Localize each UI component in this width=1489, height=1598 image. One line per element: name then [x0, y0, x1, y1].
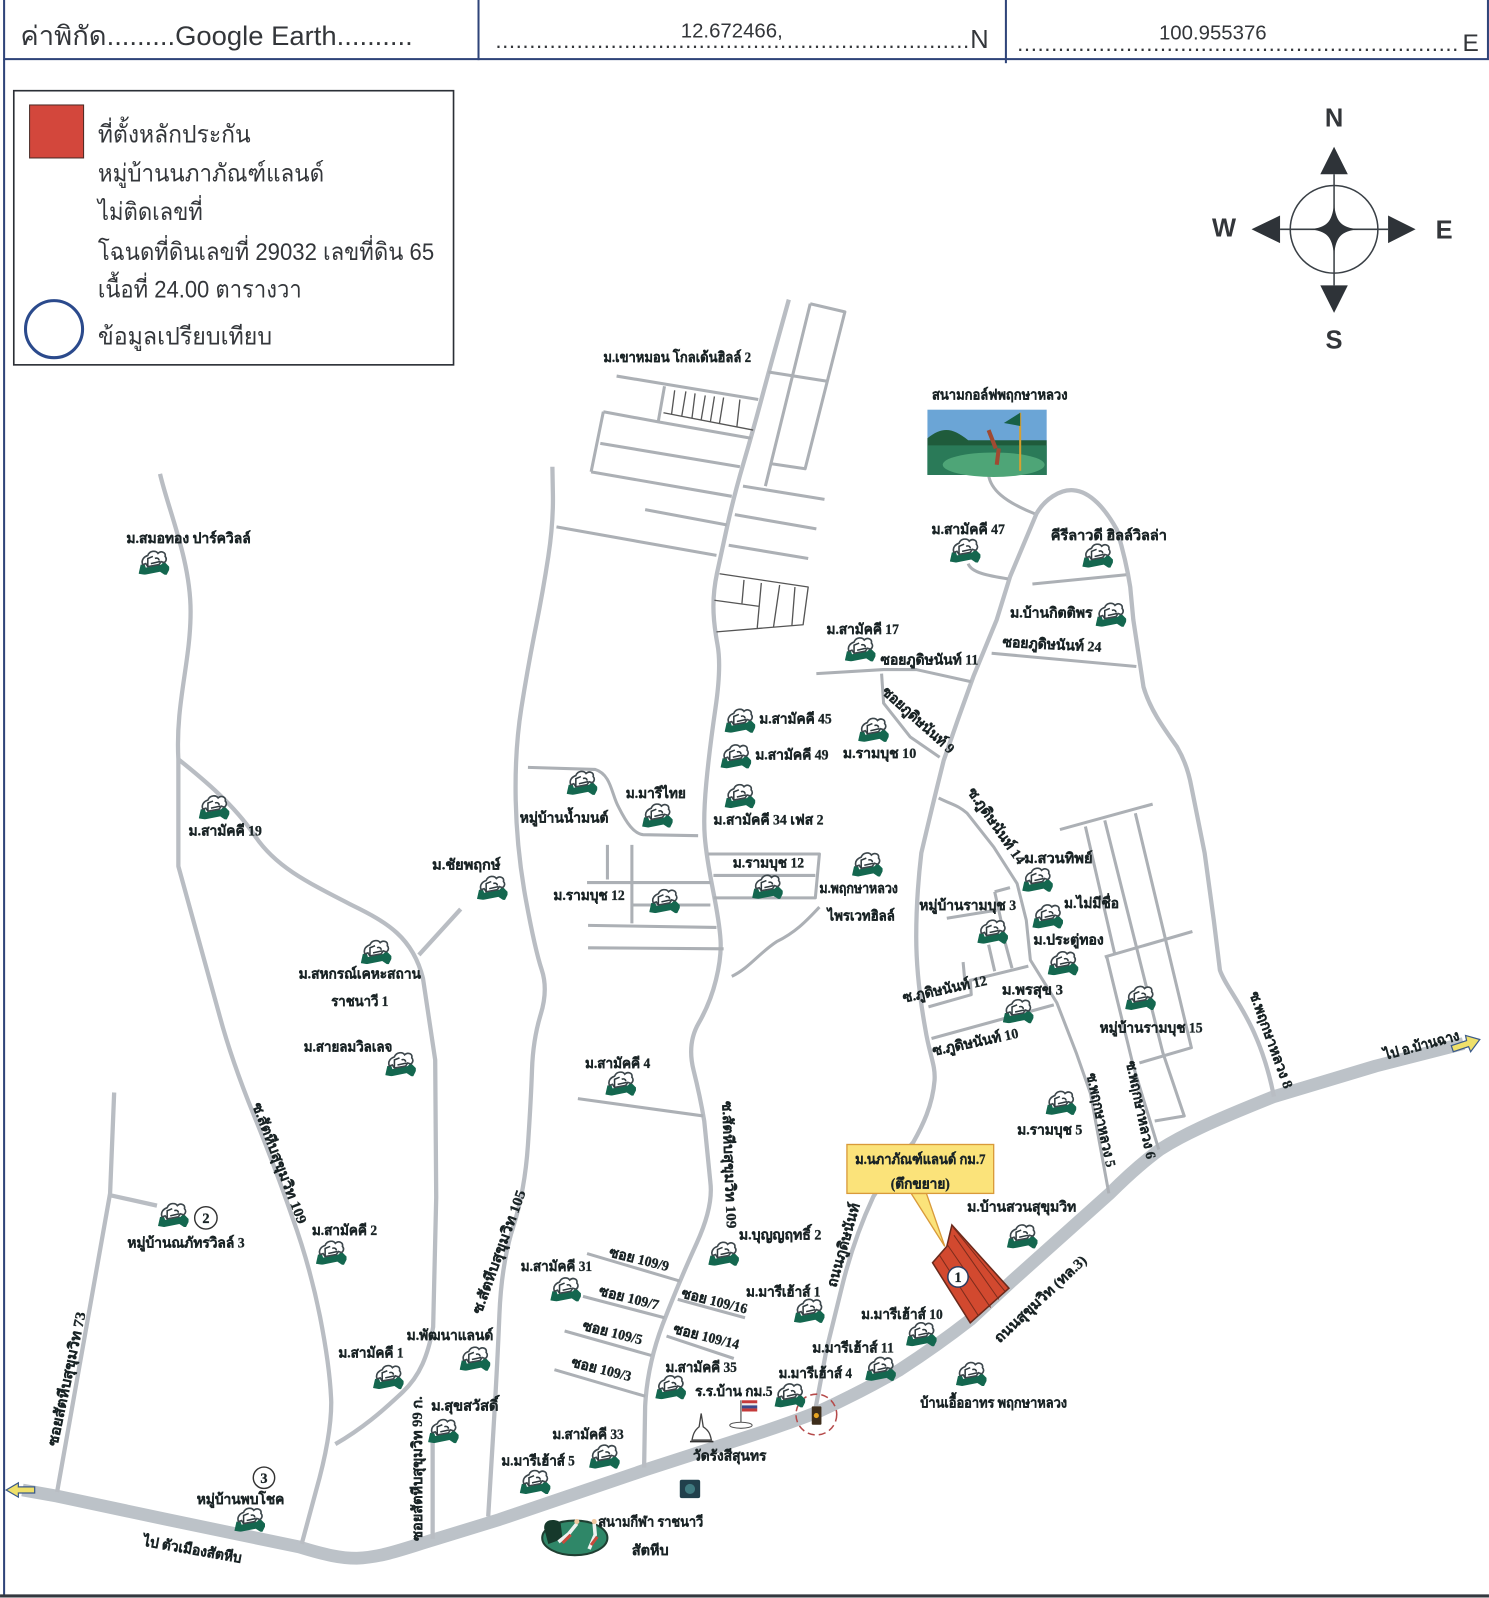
road label: Soi 24: ซอยภูดิษนันท์ 24	[1002, 634, 1102, 656]
village: Samakkhi 47: ม.สามัคคี 47	[932, 522, 1005, 538]
village: Samakkhi 2: ม.สามัคคี 2	[312, 1223, 377, 1239]
legend text: comparable data: ข้อมูลเปรียบเทียบ	[98, 323, 272, 351]
village 2: Naphat Ville 3: 2	[202, 1211, 209, 1227]
legend text: subject plot: ไม่ติดเลขที่	[96, 195, 203, 226]
village: Rambuch 3	[919, 897, 1016, 945]
village: Samakkhi 31: ม.สามัคคี 31	[521, 1259, 592, 1275]
village: Marine Thai: ม.มารีไทย	[626, 784, 686, 802]
soi Phuditsanan 14	[939, 798, 1109, 1193]
village: Marine House 4	[775, 1365, 852, 1408]
latitude value: 12.672466,	[681, 21, 783, 43]
village: Samo Thong	[126, 530, 251, 576]
legend text: subject plot: ที่ตั้งหลักประกัน	[98, 117, 251, 149]
sois 12 and 10	[928, 888, 1054, 1038]
callout: (ตึกขยาย)	[891, 1175, 950, 1192]
sois 109 side streets	[554, 1254, 745, 1396]
latitude value: ......................................................................	[495, 28, 969, 53]
stadium icon	[542, 1519, 607, 1555]
village: Rambuch 15	[1100, 986, 1203, 1036]
village: Chaiyaphruek	[432, 856, 509, 901]
village: Rambuch 5: ม.รามบุช 5	[1017, 1122, 1082, 1138]
village: Samo Thong: ม.สมอทอง ปาร์ควิลล์	[126, 530, 251, 547]
road label: Soi 109/16: ซอย 109/16	[680, 1286, 749, 1318]
village: Rambuch 15: หมู่บ้านรามบุช 15	[1100, 1019, 1203, 1036]
legend text: subject plot: เนื้อที่ 24.00 ตารางวา	[98, 272, 302, 304]
legend text: subject plot	[96, 117, 434, 304]
road label: Sattahip 109 centre: ซ.สัตหีบสุขุมวิท 109	[718, 1101, 740, 1229]
village: Sai Lom: ม.สายลมวิลเลจ	[304, 1039, 392, 1056]
village: Samakkhi 1	[338, 1345, 405, 1390]
callout: ม.นภาภัณฑ์แลนด์ กม.7	[855, 1151, 986, 1168]
village 3: Phop Chok: หมู่บ้านพบโชค	[197, 1490, 284, 1508]
golf picture	[927, 410, 1047, 477]
village: Rambuch 5	[1017, 1091, 1082, 1138]
legend text: subject plot: หมู่บ้านนภาภัณฑ์แลนด์	[98, 159, 324, 188]
village: Pratu Thong	[1033, 933, 1104, 976]
road: Sattahip Sukhumvit 109 and branch	[160, 474, 331, 1544]
village: Samakkhi 17: ม.สามัคคี 17	[827, 622, 899, 638]
road label: Soi 109/14: ซอย 109/14	[672, 1321, 741, 1353]
village: Samakkhi 49: ม.สามัคคี 49	[755, 747, 829, 763]
village: Kittiphon: ม.บ้านกิตติพร	[1010, 605, 1093, 622]
label: Golden Hills 2: ม.เขาหมอน โกลเด้นฮิลล์ 2	[603, 348, 751, 366]
road label: to Sattahip town: ไป ตัวเมืองสัตหีบ	[140, 1531, 243, 1567]
village: Navy cooperative: ม.สหกรณ์เคหะสถาน	[299, 965, 421, 982]
village: Samakkhi 49	[721, 745, 829, 769]
village: Rambuch 10: ม.รามบุช 10	[843, 746, 916, 762]
village 3: Phop Chok: 3	[260, 1471, 268, 1487]
village: Phruksa Luang Private Hill	[819, 853, 898, 924]
label: school: ร.ร.บ้าน กม.5	[695, 1383, 773, 1400]
map labels and villages	[44, 348, 1461, 1567]
village: Marine House 5: ม.มารีเฮ้าส์ 5	[501, 1453, 575, 1470]
village: Samakkhi 2	[312, 1223, 377, 1266]
village: Rambuch 12 east: ม.รามบุช 12	[733, 855, 804, 871]
village: Sai Lom	[304, 1039, 417, 1077]
temple stupa	[690, 1414, 713, 1442]
village: Samakkhi 4: ม.สามัคคี 4	[585, 1056, 650, 1072]
road arrow ends	[6, 1035, 1480, 1497]
road label: Phuditsanan road: ถนนภูดิษนันท์	[824, 1201, 864, 1289]
Phruksa Luang block	[1060, 804, 1192, 1150]
road: Soi 99	[431, 1440, 435, 1539]
road label: Phruksa Luang 5: ซ.พฤกษาหลวง 5	[1083, 1072, 1118, 1169]
coordinate source: ค่าพิกัด.........Google Earth..........	[20, 21, 413, 51]
road label: Sattahip 105: ซ.สัตหีบสุขุมวิท 105	[469, 1188, 530, 1316]
golf label: สนามกอล์ฟพฤกษาหลวง	[932, 387, 1068, 404]
village: Kittiphon	[1010, 603, 1127, 628]
header coordinate table	[4, 0, 1488, 63]
village: Bunyarit 2: ม.บุญญฤทธิ์ 2	[739, 1223, 821, 1243]
village: Samakkhi 17	[827, 622, 899, 662]
traffic light	[796, 1394, 837, 1435]
village: Phruksa Luang Private Hill: ม.พฤกษาหลวง	[819, 881, 898, 897]
village: Samakkhi 33	[552, 1427, 624, 1470]
road label: Sattahip 109 west: ซ.สัตหีบสุขุมวิท 109	[248, 1100, 310, 1226]
village: Rambuch 12 west	[553, 888, 681, 914]
subject plot	[847, 1144, 1009, 1323]
village: Samakkhi 34 phase 2	[713, 785, 823, 828]
hillside estate street grid	[556, 304, 845, 632]
village: Samakkhi 45	[725, 709, 832, 734]
road label: Phruksa Luang 6: ซ.พฤกษาหลวง 6	[1122, 1060, 1158, 1161]
road label: Sukhumvit highway: ถนนสุขุมวิท (ทล.3)	[991, 1252, 1091, 1346]
road label: Soi 109/7: ซอย 109/7	[597, 1283, 660, 1314]
village: Samakkhi 4	[585, 1056, 650, 1097]
village: Marine House 5	[501, 1453, 575, 1495]
longitude value	[1017, 23, 1479, 57]
compass letters	[1212, 104, 1453, 355]
road label: Soi 14: ซ.ภูดิษนันท์ 14	[964, 784, 1029, 868]
village: Phruksa Luang Private Hill: ไพรเวทฮิลล์	[826, 906, 895, 924]
village: Bunyarit 2	[708, 1223, 821, 1267]
village: Samakkhi 35: ม.สามัคคี 35	[666, 1360, 737, 1376]
village: Samakkhi 35	[655, 1360, 737, 1400]
village: Marine House 11	[812, 1339, 897, 1382]
plot number	[948, 1267, 968, 1287]
village: Marine Thai	[626, 784, 686, 829]
village: Rambuch 12 west: ม.รามบุช 12	[553, 888, 625, 904]
village: Navy cooperative: ราชนาวี 1	[331, 994, 388, 1010]
legend symbol: comparable data	[26, 301, 83, 358]
village 2: Naphat Ville 3: หมู่บ้านณภัทรวิลล์ 3	[127, 1234, 245, 1251]
plot number: 1	[954, 1270, 962, 1286]
compass letters: E	[1436, 216, 1453, 244]
village: Chaiyaphruek: ม.ชัยพฤกษ์	[432, 856, 501, 873]
village: Samakkhi 45: ม.สามัคคี 45	[759, 712, 832, 728]
road label: Soi 73: ซอยสัตหีบสุขุมวิท 73	[44, 1310, 89, 1448]
road label: Soi 109/9: ซอย 109/9	[607, 1245, 671, 1275]
road: Thanon Phuditsanan	[815, 490, 1274, 1409]
village: Marine House 10	[861, 1306, 943, 1347]
flag: school	[730, 1400, 757, 1428]
village: Samakkhi 19	[189, 796, 262, 840]
road: Sattahip Sukhumvit 105	[488, 467, 553, 1516]
plot polygon	[933, 1225, 1009, 1323]
compass letters: S	[1326, 327, 1343, 355]
village: Suan Thip: ม.สวนทิพย์	[1024, 850, 1093, 867]
village: Baan Suan Sukhumvit	[967, 1199, 1076, 1249]
longitude value: .................................................................	[1017, 31, 1458, 56]
road to golf course	[968, 475, 1136, 667]
road label: to Ban Chang: ไป อ.บ้านฉาง	[1380, 1026, 1461, 1064]
landmarks	[542, 1394, 837, 1555]
road: Soi Sattahip Sukhumvit 73	[57, 1093, 157, 1492]
legend panel	[14, 91, 454, 365]
road network	[6, 300, 1480, 1558]
village: Marine House 4: ม.มารีเฮ้าส์ 4	[779, 1365, 852, 1382]
village: Phonsuk 3: ม.พรสุข 3	[1002, 983, 1063, 999]
village: Suk Sawat: ม.สุขสวัสดิ์	[431, 1394, 500, 1414]
road label: Phruksa Luang 8: ซ.พฤกษาหลวง 8	[1246, 990, 1296, 1091]
village: Marine House 1	[746, 1283, 826, 1324]
callout	[847, 1144, 994, 1246]
village: Navy cooperative	[299, 941, 421, 1010]
village: Suk Sawat	[428, 1394, 500, 1444]
label: stadium: สัตหีบ	[632, 1543, 669, 1559]
square landmark icon	[680, 1480, 700, 1498]
village: Baan Suan Sukhumvit: ม.บ้านสวนสุขุมวิท	[967, 1199, 1076, 1216]
golf course	[927, 387, 1068, 477]
label: stadium: สนามกีฬา ราชนาวี	[598, 1515, 703, 1531]
village: Phonsuk 3	[1002, 983, 1063, 1024]
village: Samakkhi 31	[521, 1259, 592, 1302]
village: Suan Thip	[1022, 850, 1093, 893]
village: unnamed: ม.ไม่มีชื่อ	[1064, 892, 1119, 912]
village: Samakkhi 34 phase 2: ม.สามัคคี 34 เฟส 2	[713, 812, 823, 828]
label: stadium	[598, 1515, 703, 1559]
main road: Sukhumvit	[22, 1044, 1463, 1558]
road label: Soi 109/5: ซอย 109/5	[581, 1318, 644, 1348]
village: Marine House 10: ม.มารีเฮ้าส์ 10	[861, 1306, 943, 1323]
village: Baan Ua Athon: บ้านเอื้ออาทร พฤกษาหลวง	[920, 1391, 1067, 1411]
road label: Soi 9: ซอยภูดิษนันท์ 9	[878, 683, 958, 757]
village: Phatthana Land: ม.พัฒนาแลนด์	[407, 1327, 493, 1344]
road label: Soi 11: ซอยภูดิษนันท์ 11	[881, 651, 978, 668]
compass rose	[1212, 104, 1453, 355]
village 3: Phop Chok	[197, 1467, 284, 1533]
compass letters: W	[1212, 214, 1237, 242]
longitude value: E	[1462, 30, 1479, 57]
soi Phuditsanan 11 and 9	[816, 670, 971, 757]
village: Marine House 1: ม.มารีเฮ้าส์ 1	[746, 1283, 820, 1300]
village: Nam Mon: หมู่บ้านน้ำมนต์	[520, 806, 608, 826]
village: Khiri Lawadee: คีรีลาวดี ฮิลล์วิลล่า	[1051, 527, 1167, 544]
village: Phatthana Land	[407, 1327, 493, 1372]
longitude value: 100.955376	[1159, 23, 1267, 45]
village: Rambuch 10	[843, 718, 916, 762]
street grid: Rambuch 12 area	[528, 767, 819, 949]
village: Samakkhi 47	[932, 522, 1005, 564]
village: Samakkhi 1: ม.สามัคคี 1	[338, 1345, 404, 1361]
village: Nam Mon	[520, 771, 608, 826]
road label: Soi 109/3: ซอย 109/3	[570, 1355, 633, 1385]
compass letters: N	[1325, 104, 1343, 132]
village: Marine House 11: ม.มารีเฮ้าส์ 11	[812, 1339, 894, 1356]
road label: Soi 12: ซ.ภูดิษนันท์ 12	[901, 972, 988, 1006]
village 2: Naphat Ville 3	[127, 1204, 245, 1251]
road label: Soi 10: ซ.ภูดิษนันท์ 10	[931, 1025, 1020, 1060]
village: Samakkhi 33: ม.สามัคคี 33	[552, 1427, 624, 1443]
village: Samakkhi 19: ม.สามัคคี 19	[189, 824, 262, 840]
legend swatch: subject plot	[30, 105, 84, 158]
label: temple: วัดรังสีสุนทร	[693, 1448, 767, 1464]
village: Rambuch 12 east	[733, 855, 804, 900]
village: Rambuch 3: หมู่บ้านรามบุช 3	[919, 897, 1016, 914]
latitude value: N	[970, 26, 989, 54]
village: Pratu Thong: ม.ประตู่ทอง	[1033, 933, 1104, 949]
road: central Soi 109	[644, 300, 789, 1468]
road label: Soi 99: ซอยสัตหีบสุขุมวิท 99 ก.	[409, 1396, 426, 1541]
legend text: subject plot: โฉนดที่ดินเลขที่ 29032 เลขที่ดิน 65	[98, 235, 434, 266]
village: unnamed	[1032, 892, 1119, 929]
village: Baan Ua Athon	[920, 1363, 1067, 1411]
village: Khiri Lawadee	[1051, 527, 1167, 569]
